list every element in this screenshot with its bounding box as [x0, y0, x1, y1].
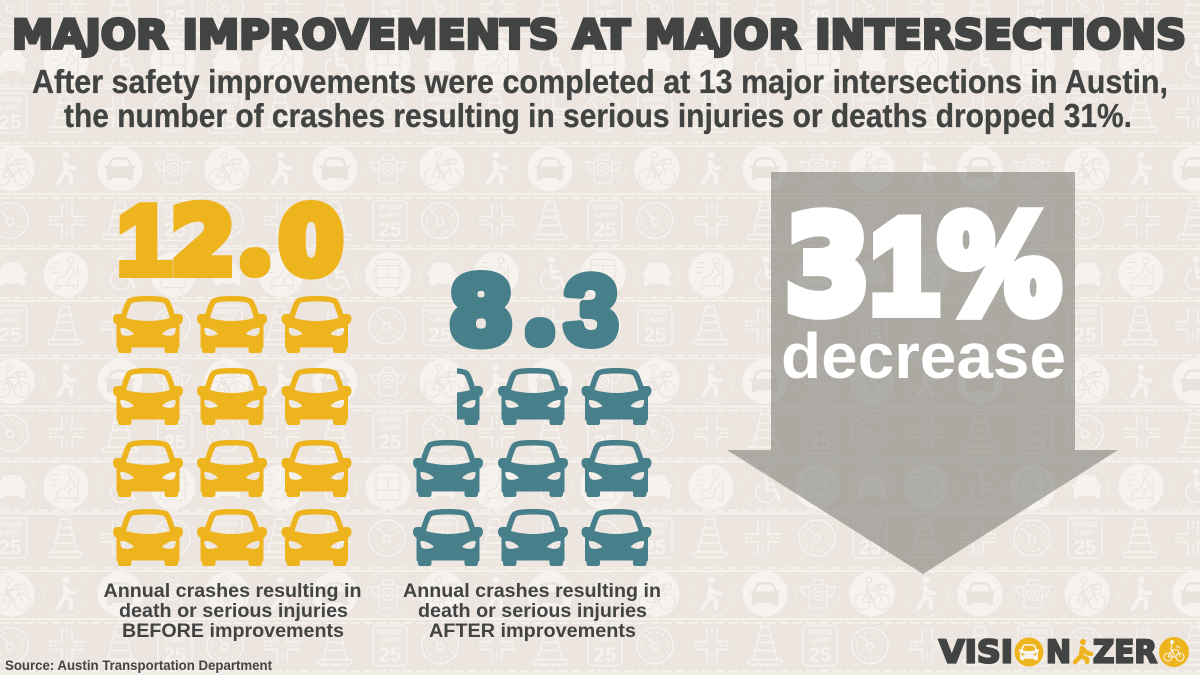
- big number: 8.3 after: 3: [564, 255, 619, 365]
- caption: after improvements: death or serious injuries: [418, 601, 647, 622]
- decrease label: decrease: [781, 320, 1066, 392]
- Vision Zero logo: [939, 634, 1189, 670]
- Vision Zero logo: VISI: [939, 634, 1013, 670]
- big number: 12.0 before: 2: [171, 188, 235, 295]
- big number: 8.3 after: 8: [449, 258, 513, 365]
- source note: Source: Austin Transportation Department: [5, 658, 272, 673]
- logo icon: walking person: [1075, 639, 1091, 662]
- subtitle: [32, 63, 1168, 134]
- title: MAJOR IMPROVEMENTS AT MAJOR INTERSECTIONS: [12, 12, 1186, 58]
- logo icon: cyclist in circle: [1159, 637, 1189, 667]
- big number: 12.0 before: 0: [279, 188, 343, 295]
- Vision Zero logo: N: [1046, 634, 1071, 670]
- 31% figure: 31%: [785, 190, 1061, 344]
- caption: before improvements: BEFORE improvements: [122, 621, 344, 642]
- big number: 12.0 before: 1: [117, 185, 172, 295]
- caption: before improvements: death or serious injuries: [119, 601, 348, 622]
- big number: 8.3 after: .: [536, 315, 544, 339]
- arrow shape: [727, 172, 1118, 574]
- caption: before improvements: [104, 581, 362, 642]
- down arrow callout: [727, 172, 1118, 574]
- car grid: 12 before (yellow): [113, 296, 352, 566]
- caption: before improvements: Annual crashes resulting in: [104, 581, 362, 602]
- car grid: 8.3 after (teal): [413, 368, 652, 566]
- logo icon: car in circle: [1014, 638, 1044, 666]
- caption: after improvements: Annual crashes resulting in: [403, 581, 661, 602]
- caption: after improvements: [403, 581, 661, 642]
- big number: 12.0 before: .: [251, 245, 259, 269]
- caption: after improvements: AFTER improvements: [429, 621, 636, 642]
- Vision Zero logo: ZER: [1093, 634, 1157, 670]
